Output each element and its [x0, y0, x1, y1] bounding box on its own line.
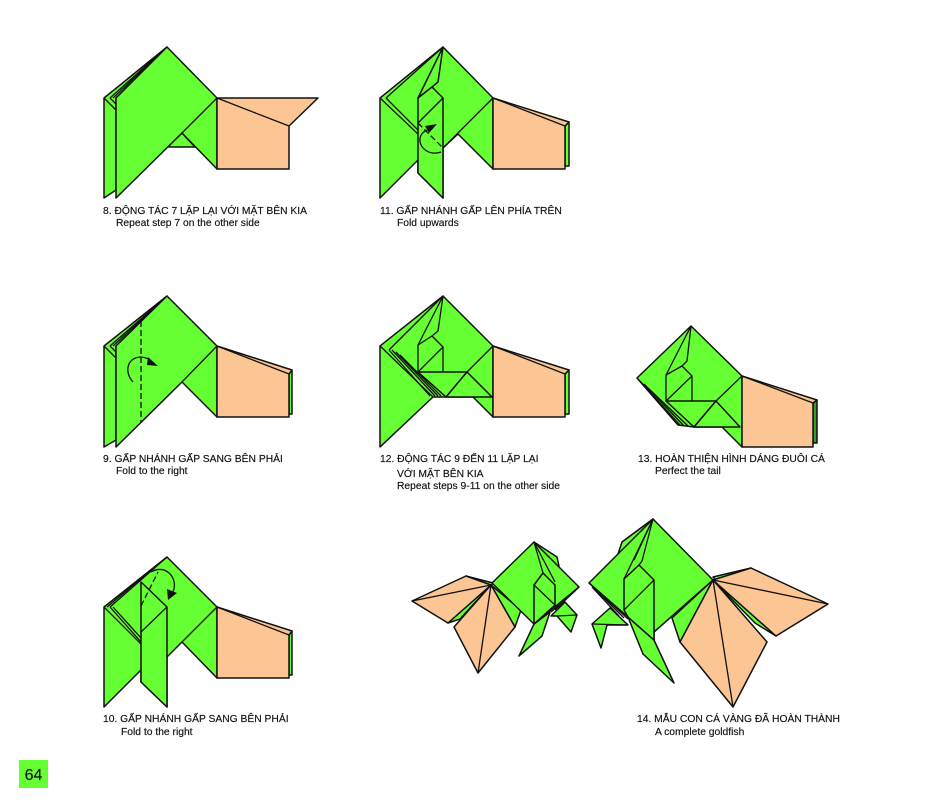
caption: step 13: 13. HOÀN THIỆN HÌNH DÁNG ĐUÔI CÁ: [638, 452, 825, 465]
flap: [141, 582, 167, 707]
diagram: goldfish right view: [589, 519, 828, 707]
caption: step 11: 11. GẤP NHÁNH GẤP LÊN PHÍA TRÊN: [380, 204, 562, 217]
caption: step 12: 12. ĐỘNG TÁC 9 ĐẾN 11 LẶP LẠI: [380, 452, 539, 465]
fold line: [418, 123, 443, 148]
fold line: [141, 572, 158, 606]
page number badge: [19, 760, 48, 788]
fold line: [140, 321, 142, 422]
caption: step 9: 9. GẤP NHÁNH GẤP SANG BÊN PHẢI: [103, 452, 283, 465]
caption: step 14: A complete goldfish: [655, 727, 745, 738]
arrow: fold over: [151, 569, 177, 600]
caption: step 9: [103, 452, 283, 477]
caption: step 12: Repeat steps 9-11 on the other side: [397, 481, 560, 492]
arrow: fold right: [128, 357, 158, 382]
diagram: step 12: [380, 296, 569, 447]
caption: step 13: [638, 452, 825, 477]
diagram: step 13: [637, 326, 817, 447]
caption: step 14: 14. MẪU CON CÁ VÀNG ĐÃ HOÀN THÀNH: [637, 712, 840, 725]
caption: step 12: [380, 452, 560, 492]
caption: step 8: [103, 204, 307, 229]
caption: step 10: [103, 712, 289, 738]
diagram: step 11: [380, 47, 569, 198]
caption: step 8: 8. ĐỘNG TÁC 7 LẶP LẠI VỚI MẶT BÊN KIA: [103, 204, 307, 217]
caption: step 12: VỚI MẶT BÊN KIA: [397, 467, 484, 480]
diagram: goldfish left view: [412, 542, 579, 673]
page number badge: 64: [25, 767, 42, 784]
diagram: step 9: [104, 296, 292, 447]
caption: step 14: [637, 712, 840, 738]
diagram: step 10: [104, 557, 292, 707]
caption: step 10: 10. GẤP NHÁNH GẤP SANG BÊN PHẢI: [103, 712, 289, 725]
diagram: step 8: [104, 47, 318, 198]
caption: step 10: Fold to the right: [121, 727, 193, 738]
caption: step 11: [380, 204, 562, 229]
caption: step 8: Repeat step 7 on the other side: [116, 218, 260, 229]
arrow: fold up: [420, 124, 441, 153]
caption: step 9: Fold to the right: [116, 466, 188, 477]
caption: step 13: Perfect the tail: [655, 466, 721, 477]
caption: step 11: Fold upwards: [397, 218, 459, 229]
